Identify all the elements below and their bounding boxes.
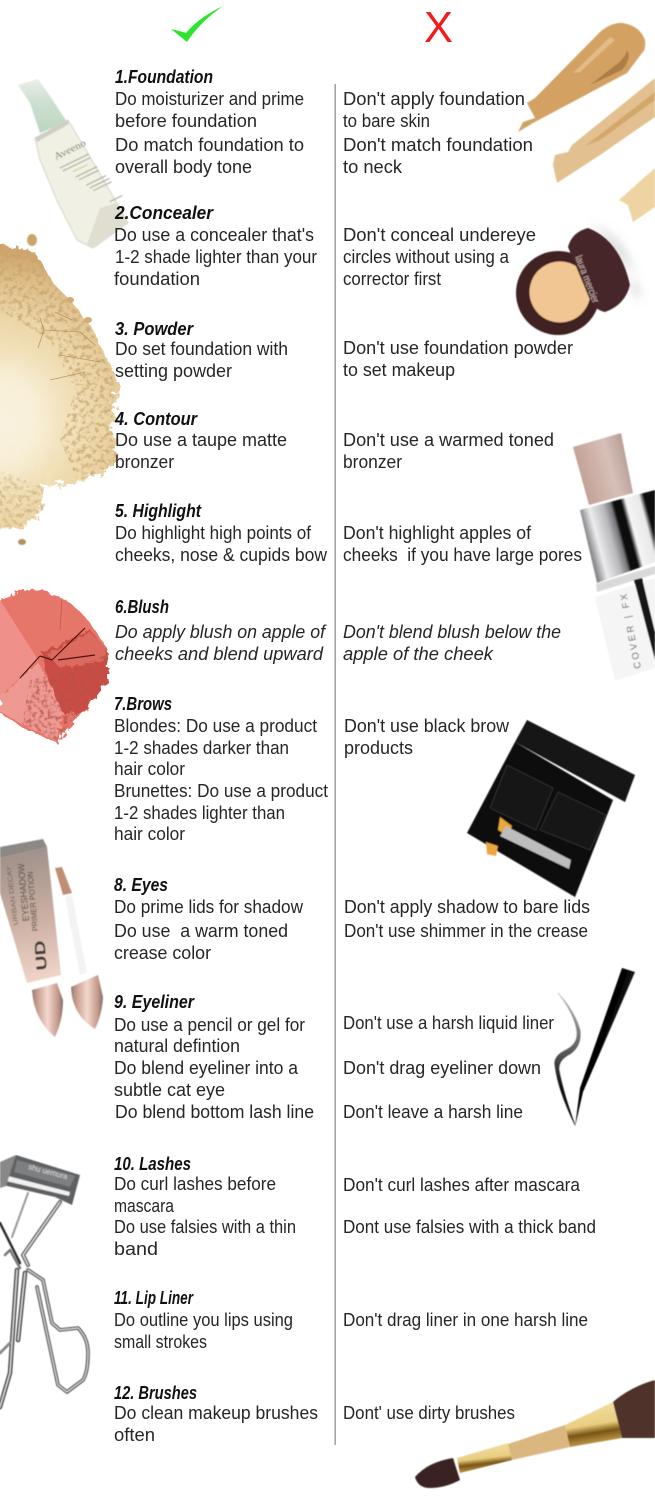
section 9: eyeliner dos: Do blend bottom lash line: [115, 1102, 314, 1122]
section 3: powder don'ts: to set makeup: [343, 360, 455, 380]
section 1: foundation don'ts: [343, 89, 533, 177]
section 9: eyeliner don'ts: Don't use a harsh liquid liner: [343, 1013, 554, 1033]
icon: highlighter stick: [573, 433, 655, 681]
icon: concealer compact: laura mercier: [572, 254, 601, 305]
section 4: contour dos: Do use a taupe matte: [115, 430, 287, 450]
section 2: concealer dos: Do use a concealer that's: [114, 225, 314, 245]
section 9: eyeliner dos: [114, 992, 314, 1122]
icon: highlighter stick: COVER | FX: [619, 592, 644, 670]
section 8: eyes dos: [114, 875, 304, 963]
section 11: lip liner dos: 11. Lip Liner: [114, 1288, 194, 1308]
section 1: foundation don'ts: to neck: [343, 157, 403, 177]
section 10: lashes don'ts: [343, 1175, 596, 1237]
section 7: brows don'ts: products: [344, 738, 413, 758]
icon: Aveeno moisturizer bottle: [18, 79, 128, 248]
section 1: foundation dos: [115, 67, 304, 177]
section 2: concealer don'ts: corrector first: [343, 269, 441, 289]
section 8: eyes dos: 8. Eyes: [114, 875, 168, 895]
section 5: highlight dos: Do highlight high points of: [115, 523, 312, 543]
section 6: blush dos: Do apply blush on apple of: [115, 622, 327, 642]
section 1: foundation dos: Do match foundation to: [115, 135, 304, 155]
section 7: brows dos: 7.Brows: [114, 694, 172, 714]
section 2: concealer dos: foundation: [114, 269, 200, 289]
section 11: lip liner dos: Do outline you lips using: [114, 1310, 293, 1330]
section 5: highlight dos: 5. Highlight: [115, 501, 202, 521]
section 5: highlight don'ts: Don't highlight apples of: [343, 523, 532, 543]
section 6: blush don'ts: apple of the cheek: [343, 644, 494, 664]
section 12: brushes dos: [114, 1383, 318, 1445]
section 1: foundation don'ts: Don't apply foundation: [343, 89, 525, 109]
section 10: lashes dos: band: [114, 1239, 158, 1259]
section 7: brows dos: hair color: [114, 824, 185, 844]
section 4: contour dos: 4. Contour: [114, 409, 198, 429]
section 8: eyes dos: Do use a warm toned: [114, 921, 288, 941]
icon: eyeshadow primer tube: UD: [31, 940, 51, 971]
icon: eyelash curler: shu uemura: [27, 1162, 69, 1181]
section 7: brows dos: 1-2 shades darker than: [114, 738, 289, 758]
section 11: lip liner dos: small strokes: [114, 1332, 207, 1352]
section 4: contour dos: bronzer: [115, 452, 174, 472]
section 4: contour dos: [114, 409, 287, 472]
section 1: foundation don'ts: to bare skin: [343, 111, 430, 131]
section 3: powder dos: 3. Powder: [115, 319, 194, 339]
section 7: brows dos: 1-2 shades lighter than: [114, 803, 285, 823]
icon: red X: X: [424, 3, 453, 52]
section 5: highlight don'ts: cheeks if you have large pores: [343, 545, 582, 565]
section 6: blush dos: [115, 597, 327, 664]
section 9: eyeliner don'ts: Don't leave a harsh line: [343, 1102, 523, 1122]
section 10: lashes dos: Do use falsies with a thin: [114, 1217, 296, 1237]
section 5: highlight dos: [115, 501, 328, 565]
icon: brow kit: [467, 720, 635, 897]
icon: green check mark: [171, 6, 223, 42]
section 10: lashes dos: 10. Lashes: [114, 1154, 191, 1174]
icon: eyelash curler: [0, 1155, 88, 1407]
section 10: lashes don'ts: Dont use falsies with a thick band: [343, 1217, 596, 1237]
section 3: powder dos: setting powder: [115, 361, 232, 381]
section 9: eyeliner dos: Do blend eyeliner into a: [114, 1058, 299, 1078]
column divider: [334, 84, 336, 1445]
section 9: eyeliner dos: Do use a pencil or gel for: [114, 1015, 305, 1035]
section 6: blush dos: 6.Blush: [115, 597, 169, 617]
section 10: lashes dos: [114, 1154, 296, 1259]
section 3: powder don'ts: Don't use foundation powder: [343, 338, 573, 358]
section 12: brushes don'ts: Dont' use dirty brushes: [343, 1403, 515, 1423]
section 5: highlight don'ts: [343, 523, 582, 565]
section 8: eyes dos: crease color: [114, 943, 211, 963]
section 9: eyeliner dos: natural defintion: [114, 1036, 240, 1056]
section 9: eyeliner don'ts: Don't drag eyeliner down: [343, 1058, 541, 1078]
icon: makeup brush: [415, 1380, 655, 1488]
section 3: powder dos: [115, 319, 288, 381]
section 1: foundation dos: before foundation: [115, 111, 257, 131]
section 7: brows dos: Brunettes: Do use a product: [114, 781, 328, 801]
section 8: eyes don'ts: Don't use shimmer in the crease: [344, 921, 588, 941]
section 2: concealer don'ts: [343, 225, 536, 289]
section 12: brushes dos: often: [114, 1425, 155, 1445]
icon: loose powder: [0, 234, 118, 545]
section 1: foundation don'ts: Don't match foundation: [343, 135, 533, 155]
section 7: brows dos: [114, 694, 328, 844]
section 8: eyes don'ts: Don't apply shadow to bare lids: [344, 897, 590, 917]
section 4: contour don'ts: [343, 430, 554, 472]
icon: eyeshadow primer tube: URBAN DECAY: [6, 864, 20, 926]
icon: Aveeno moisturizer bottle: Aveeno: [52, 138, 88, 163]
section 2: concealer dos: 1-2 shade lighter than your: [115, 247, 317, 267]
section 6: blush don'ts: [343, 622, 561, 664]
section 4: contour don'ts: bronzer: [343, 452, 402, 472]
section 9: eyeliner dos: 9. Eyeliner: [114, 992, 195, 1012]
section 1: foundation dos: overall body tone: [115, 157, 252, 177]
section 9: eyeliner don'ts: [343, 1013, 554, 1122]
section 10: lashes don'ts: Don't curl lashes after mascara: [343, 1175, 581, 1195]
section 6: blush dos: cheeks and blend upward: [115, 644, 324, 664]
section 7: brows dos: Blondes: Do use a product: [114, 716, 317, 736]
icon: eyeshadow primer tube: [0, 839, 103, 1037]
section 11: lip liner don'ts: Don't drag liner in one harsh line: [343, 1310, 588, 1330]
section 3: powder don'ts: [343, 338, 573, 380]
icon: eyeliner pen and swoosh: [555, 968, 635, 1127]
section 7: brows don'ts: [344, 716, 510, 758]
section 7: brows don'ts: Don't use black brow: [344, 716, 510, 736]
section 8: eyes dos: Do prime lids for shadow: [114, 897, 304, 917]
section 2: concealer dos: [114, 203, 317, 289]
icon: foundation swatches: [518, 23, 655, 222]
icon: eyeshadow primer tube: EYESHADOW: [16, 863, 31, 922]
section 10: lashes dos: Do curl lashes before: [114, 1174, 276, 1194]
icon: eyeshadow primer tube: PRIMER POTION: [26, 871, 40, 932]
section 8: eyes don'ts: [344, 897, 590, 941]
section 11: lip liner dos: [114, 1288, 293, 1352]
section 6: blush don'ts: Don't blend blush below the: [343, 622, 561, 642]
section 4: contour don'ts: Don't use a warmed toned: [343, 430, 554, 450]
icon: concealer compact: [516, 224, 640, 335]
section 10: lashes dos: mascara: [114, 1196, 175, 1216]
section 9: eyeliner dos: subtle cat eye: [114, 1080, 225, 1100]
section 2: concealer dos: 2.Concealer: [114, 203, 214, 223]
section 2: concealer don'ts: Don't conceal undereye: [343, 225, 536, 245]
section 12: brushes dos: 12. Brushes: [114, 1383, 197, 1403]
section 3: powder dos: Do set foundation with: [115, 339, 288, 359]
section 1: foundation dos: 1.Foundation: [115, 67, 213, 87]
section 5: highlight dos: cheeks, nose & cupids bow: [115, 545, 328, 565]
section 2: concealer don'ts: circles without using a: [343, 247, 510, 267]
section 1: foundation dos: Do moisturizer and prime: [115, 89, 304, 109]
section 12: brushes dos: Do clean makeup brushes: [114, 1403, 318, 1423]
icon: crushed blush: [0, 590, 108, 743]
section 7: brows dos: hair color: [114, 759, 185, 779]
